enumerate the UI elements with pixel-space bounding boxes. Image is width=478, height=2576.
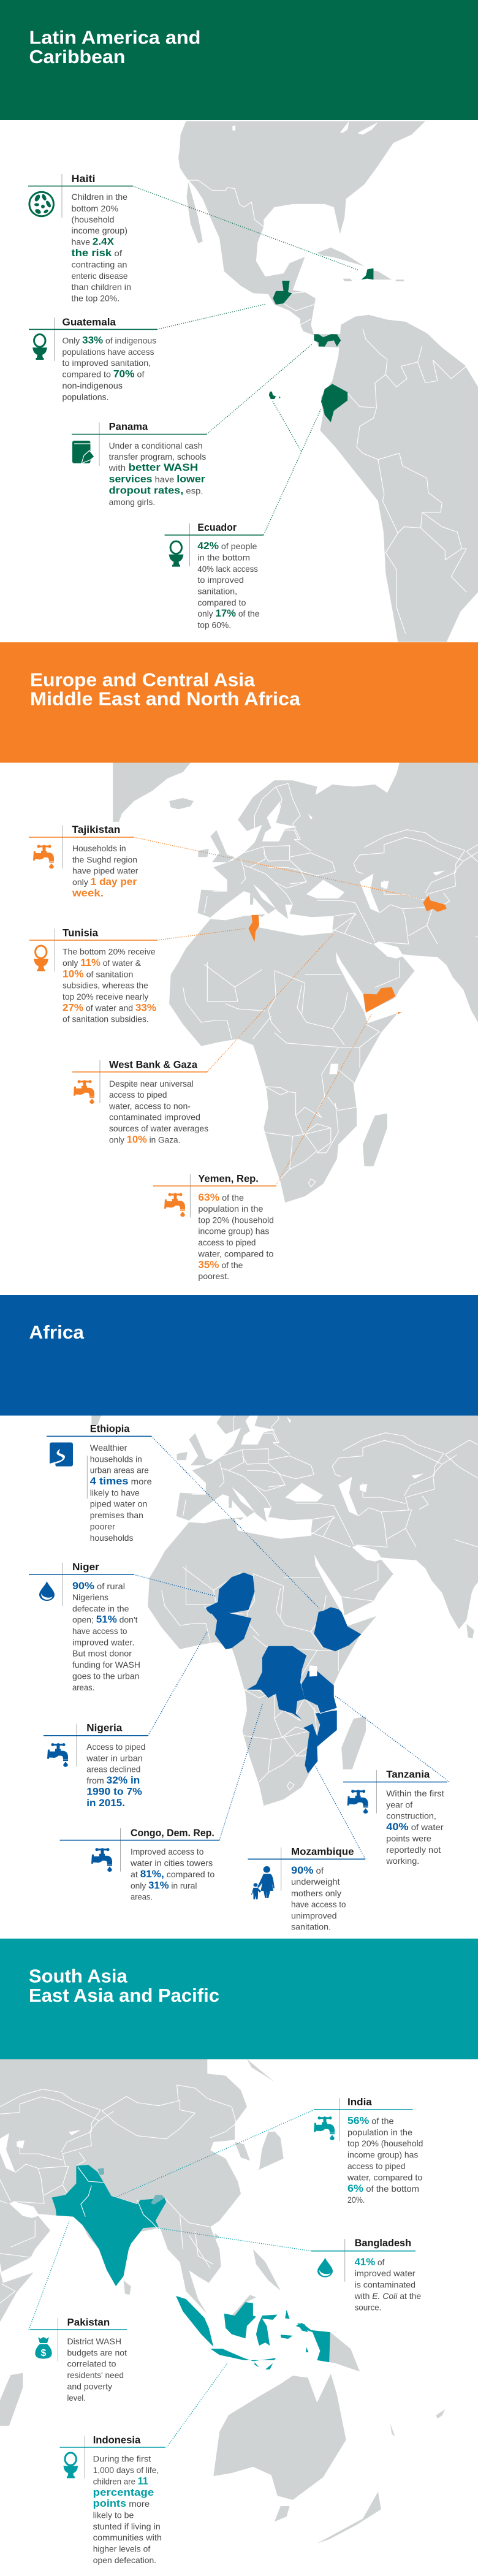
highlighted islands: Galapagos	[269, 392, 281, 399]
text: India statistic: 56% of the	[347, 2115, 394, 2127]
text: Indonesia statistic: stunted if living in	[93, 2521, 161, 2531]
text: Haiti statistic: have 2.4X	[71, 236, 115, 248]
text: Haiti statistic	[71, 192, 131, 303]
text: Ecuador statistic: 40% lack access	[197, 564, 258, 574]
highlighted country: Congo, Dem. Rep.	[247, 1646, 306, 1720]
text: Ecuador statistic: in the bottom	[197, 552, 250, 562]
text: Yemen statistic: 63% of the	[198, 1191, 244, 1203]
text: Congo statistic: at 81%, compared to	[131, 1868, 215, 1880]
callout: West Bank & Gaza	[72, 1058, 208, 1145]
icon: money bag: $	[41, 2348, 47, 2358]
text: West Bank & Gaza statistic: sources of water averages	[109, 1123, 208, 1133]
map: North and South America	[178, 121, 478, 642]
text: Ethiopia statistic: urban areas are	[90, 1465, 149, 1475]
callout: West Bank & Gaza: West Bank & Gaza	[109, 1058, 198, 1070]
icon: water tap	[91, 1848, 112, 1872]
text: West Bank & Gaza statistic: access to piped	[109, 1090, 167, 1100]
section header: Africa: Africa	[29, 1321, 85, 1343]
map: Asia and Oceania	[0, 2022, 445, 2544]
icon: water tap	[74, 1080, 94, 1104]
text: Yemen statistic: population in the	[198, 1204, 264, 1214]
leader lines: South and East Asia	[29, 2110, 314, 2447]
text: Congo statistic: only 31% in rural	[131, 1879, 197, 1891]
text: Indonesia statistic: higher levels of	[93, 2544, 150, 2553]
callout: Mozambique: Mozambique	[291, 1846, 354, 1858]
text: Tunisia statistic: subsidies, whereas the	[63, 981, 148, 990]
text: Guatemala statistic: to improved sanitation,	[63, 358, 151, 368]
callout: India: India	[347, 2096, 372, 2108]
text: Yemen statistic: access to piped	[198, 1237, 256, 1247]
callout: Ethiopia: Ethiopia	[90, 1423, 130, 1435]
icon: water tap	[33, 845, 54, 868]
text: Haiti statistic: the risk of	[71, 247, 122, 259]
leader lines: Europe and MENA	[134, 837, 422, 1186]
text: Tanzania statistic: working.	[385, 1856, 419, 1866]
text: Tajikistan statistic: the Sughd region	[72, 854, 137, 864]
text: Guatemala statistic: populations have access	[63, 347, 154, 357]
callout: Tunisia	[29, 927, 157, 1024]
text: Indonesia statistic: likely to be	[93, 2510, 134, 2520]
text: Guatemala statistic	[63, 334, 156, 401]
text: Ecuador statistic: to improved	[197, 575, 244, 585]
text: Yemen statistic: poorest.	[198, 1271, 229, 1281]
text: Mozambique statistic: sanitation.	[291, 1922, 331, 1932]
text: Ethiopia statistic: Wealthier	[90, 1443, 127, 1453]
panel: Europe, Central Asia, Middle East and North Africa section	[0, 642, 478, 1284]
callout: Yemen, Rep.: Yemen, Rep.	[198, 1172, 259, 1184]
text: Niger statistic	[72, 1580, 140, 1692]
text: India statistic	[347, 2115, 423, 2205]
text: Haiti statistic: Children in the	[71, 192, 127, 202]
text: Tunisia statistic: 10% of sanitation	[63, 968, 133, 979]
map: Africa and Eurasia	[91, 1366, 478, 1887]
icon: bacteria	[29, 192, 54, 216]
highlighted country: Yemen	[363, 987, 402, 1014]
text: Pakistan statistic: District WASH	[67, 2336, 121, 2346]
text: India statistic: population in the	[347, 2127, 412, 2137]
icon: water tap	[314, 2116, 335, 2140]
callout: Indonesia	[60, 2434, 165, 2565]
icon: toilet	[63, 2453, 78, 2478]
text: Pakistan statistic	[67, 2336, 127, 2403]
text: Nigeria statistic: Access to piped	[86, 1742, 145, 1752]
highlighted country: Niger	[206, 1573, 254, 1614]
leader lines: Latin America	[132, 186, 359, 535]
text: Congo statistic	[130, 1847, 215, 1902]
panel: South Asia, East Asia and Pacific section	[0, 1939, 478, 2565]
text: Niger statistic: Nigeriens	[72, 1592, 108, 1602]
callout: Panama	[72, 421, 207, 507]
text: Tanzania statistic: construction,	[386, 1811, 436, 1821]
icon: water drop	[317, 2258, 333, 2278]
text: Tanzania statistic: 40% of water	[386, 1821, 444, 1833]
text: Tajikistan statistic: only 1 day per	[72, 876, 137, 887]
callout: Tanzania	[343, 1768, 447, 1866]
text: Nigeria statistic: 1990 to 7%	[86, 1786, 142, 1797]
callout: Ecuador	[165, 522, 264, 630]
callout: Tajikistan	[29, 824, 138, 899]
section header: Latin America and Caribbean: Latin America and	[29, 27, 201, 48]
callout: Pakistan: Pakistan	[67, 2317, 110, 2328]
text: Panama statistic	[108, 441, 206, 507]
text: Yemen statistic: water, compared to	[197, 1248, 274, 1258]
text: India statistic: 6% of the bottom	[347, 2183, 419, 2194]
icon: toilet	[169, 541, 184, 567]
text: Ethiopia statistic: households in	[90, 1454, 142, 1464]
highlighted country: Tunisia	[248, 915, 259, 942]
text: Panama statistic: transfer program, schools	[109, 452, 206, 462]
text: Mozambique statistic: underweight	[291, 1877, 340, 1886]
callout: Tanzania: Tanzania	[386, 1768, 430, 1780]
text: Haiti statistic: the top 20%.	[71, 293, 120, 303]
text: Niger statistic: areas.	[72, 1682, 94, 1692]
text: Tunisia statistic: of sanitation subsidies.	[63, 1014, 149, 1024]
text: Nigeria statistic: in 2015.	[86, 1797, 125, 1809]
text: Ethiopia statistic: likely to have	[90, 1487, 140, 1497]
text: Bangladesh statistic: is contaminated	[355, 2280, 415, 2290]
text: Indonesia statistic: 1,000 days of life,	[93, 2465, 159, 2475]
text: India statistic: water, compared to	[347, 2172, 423, 2182]
text: Pakistan statistic: level.	[67, 2393, 86, 2403]
section header: Latin America and Caribbean: Caribbean	[29, 46, 125, 67]
highlighted country: Guatemala	[273, 281, 292, 305]
text: Tanzania statistic: Within the first	[386, 1788, 444, 1798]
callout: Yemen, Rep.	[153, 1172, 276, 1281]
text: Panama statistic: with better WASH	[108, 462, 198, 473]
text: West Bank & Gaza statistic: only 10% in Gaza.	[109, 1134, 180, 1145]
text: Bangladesh statistic: with E. Coli at the	[354, 2291, 421, 2301]
text: Pakistan statistic: and poverty	[67, 2381, 112, 2391]
text: India statistic: top 20% (household	[347, 2138, 423, 2148]
section header: Africa	[0, 1295, 478, 1416]
icon: water tap	[47, 1743, 68, 1767]
leader lines: Africa	[134, 1436, 449, 1859]
text: Ethiopia statistic: poorer	[90, 1521, 115, 1531]
icon: water drop	[39, 1581, 55, 1601]
text: Tajikistan statistic: have piped water	[72, 866, 138, 876]
text: Bangladesh statistic: improved water	[355, 2268, 415, 2278]
text: Guatemala statistic: Only 33% of indigenous	[63, 334, 156, 346]
highlighted country: Ecuador	[321, 384, 347, 422]
text: Tanzania statistic: year of	[386, 1799, 412, 1809]
text: Niger statistic: open; 51% don't	[72, 1614, 138, 1625]
text: Yemen statistic: top 20% (household	[198, 1215, 274, 1225]
callout: Pakistan	[30, 2317, 127, 2403]
text: Ecuador statistic: compared to	[197, 598, 246, 607]
section header: South Asia, East Asia and Pacific: South Asia	[29, 1965, 127, 1986]
text: Bangladesh statistic	[354, 2256, 421, 2312]
highlighted country: Tajikistan	[423, 895, 447, 912]
text: Pakistan statistic: residents' need	[67, 2370, 124, 2380]
panel: Latin America and Caribbean section	[0, 0, 478, 642]
text: West Bank & Gaza statistic: water, access to non-	[108, 1101, 191, 1111]
icon: water tap	[164, 1193, 185, 1217]
text: Congo statistic: areas.	[131, 1892, 153, 1902]
text: Tunisia statistic	[63, 947, 156, 1024]
text: West Bank & Gaza statistic	[108, 1079, 208, 1145]
text: Haiti statistic: enteric disease	[71, 271, 128, 281]
highlighted country: Tanzania	[302, 1671, 337, 1714]
callout: India	[314, 2096, 423, 2205]
callout: Guatemala: Guatemala	[63, 316, 116, 328]
text: Niger statistic: improved water.	[72, 1637, 135, 1647]
text: Guatemala statistic: non-indigenous	[63, 381, 123, 390]
text: Yemen statistic	[197, 1191, 274, 1281]
callout: Tunisia: Tunisia	[63, 927, 99, 939]
text: Nigeria statistic	[86, 1742, 145, 1809]
icon: toilet	[32, 335, 47, 360]
text: Ecuador statistic: 42% of people	[197, 540, 257, 552]
text: Pakistan statistic: correlated to	[67, 2359, 116, 2369]
section header: South Asia, East Asia and Pacific	[0, 1939, 478, 2059]
text: Tanzania statistic: reportedly not	[386, 1845, 441, 1855]
text: Indonesia statistic: open defecation.	[93, 2555, 156, 2565]
text: Mozambique statistic: 90% of	[291, 1864, 324, 1876]
icon: money bag	[35, 2337, 52, 2358]
text: Niger statistic: defecate in the	[72, 1603, 129, 1613]
text: Tunisia statistic: top 20% receive nearly	[63, 992, 148, 1001]
text: Panama statistic: dropout rates, esp.	[109, 484, 203, 496]
text: Mozambique statistic: mothers only	[291, 1888, 341, 1898]
panel: Africa section	[0, 1295, 478, 1932]
highlighted country: Ethiopia	[314, 1607, 362, 1651]
text: Nigeria statistic: water in urban	[86, 1753, 143, 1763]
callout: Nigeria: Nigeria	[86, 1722, 123, 1734]
text: Indonesia statistic: During the first	[93, 2454, 151, 2464]
text: Ecuador statistic: sanitation,	[197, 586, 237, 596]
callout: Congo, Dem. Rep.: Congo, Dem. Rep.	[131, 1827, 214, 1839]
text: Mozambique statistic: unimproved	[291, 1910, 337, 1920]
text: Ethiopia statistic: households	[90, 1533, 133, 1543]
text: Tajikistan statistic: week.	[72, 887, 104, 899]
callout: Niger	[29, 1561, 140, 1692]
text: Haiti statistic: income group)	[71, 226, 127, 235]
callout: Mozambique	[248, 1846, 365, 1932]
text: India statistic: 20%.	[347, 2195, 365, 2205]
text: Yemen statistic: 35% of the	[198, 1259, 243, 1271]
text: Indonesia statistic: points more	[93, 2498, 150, 2509]
text: Panama statistic: among girls.	[109, 497, 155, 507]
highlighted country: Mozambique	[303, 1711, 337, 1774]
section header: South Asia, East Asia and Pacific: East Asia and Pacific	[29, 1985, 219, 2006]
text: Congo statistic: water in cities towers	[130, 1858, 213, 1868]
text: Haiti statistic: bottom 20%	[71, 203, 118, 213]
callout: Haiti: Haiti	[71, 173, 96, 184]
text: Haiti statistic: contracting an	[71, 260, 127, 270]
callout: Indonesia: Indonesia	[93, 2434, 141, 2445]
callout: Niger: Niger	[72, 1561, 99, 1573]
callout: Guatemala	[29, 316, 157, 401]
callout: Bangladesh: Bangladesh	[355, 2237, 411, 2249]
callout: Bangladesh	[311, 2237, 421, 2312]
text: Pakistan statistic: budgets are not	[67, 2347, 127, 2357]
text: Guatemala statistic: populations.	[63, 392, 109, 401]
callout: Nigeria	[44, 1722, 148, 1809]
text: Ethiopia statistic	[90, 1443, 152, 1543]
text: Bangladesh statistic: source.	[355, 2302, 381, 2312]
map: Europe, Middle East and Africa	[113, 762, 478, 1284]
highlighted country: Panama	[314, 334, 341, 346]
text: Panama statistic: Under a conditional cash	[109, 441, 203, 450]
text: Indonesia statistic: percentage	[93, 2487, 154, 2498]
highlighted country: Indonesia	[176, 2296, 330, 2369]
text: Niger statistic: But most donor	[72, 1649, 132, 1658]
text: Ethiopia statistic: piped water on	[90, 1499, 147, 1509]
highlighted country: Haiti	[362, 268, 373, 279]
text: West Bank & Gaza statistic: contaminated improved	[109, 1112, 200, 1122]
text: Bangladesh statistic: 41% of	[355, 2256, 384, 2268]
callout: Haiti	[28, 173, 132, 303]
callout: Congo, Dem. Rep.	[60, 1827, 219, 1902]
text: Indonesia statistic: children are 11	[93, 2475, 148, 2487]
text: Tanzania statistic: points were	[386, 1834, 431, 1844]
text: Ethiopia statistic: 4 times more	[90, 1475, 152, 1487]
highlighted countries: South Asia	[52, 2165, 166, 2286]
text: Indonesia statistic: communities with	[93, 2532, 162, 2542]
icon: water tap	[347, 1790, 368, 1814]
text: Ecuador statistic: only 17% of the	[197, 607, 260, 619]
text: West Bank & Gaza statistic: Despite near universal	[109, 1079, 194, 1089]
text: Yemen statistic: income group) has	[198, 1226, 269, 1236]
callout: Tajikistan: Tajikistan	[72, 824, 120, 835]
text: Mozambique statistic: have access to	[291, 1899, 346, 1909]
text: Tajikistan statistic: Households in	[72, 843, 126, 853]
text: Niger statistic: funding for WASH	[72, 1660, 140, 1670]
text: Ethiopia statistic: premises than	[90, 1510, 143, 1520]
text: Guatemala statistic: compared to 70% of	[63, 368, 145, 380]
text: Ecuador statistic: top 60%.	[197, 620, 231, 630]
section header: Latin America and Caribbean	[0, 0, 478, 120]
text: Tunisia statistic: The bottom 20% receive	[63, 947, 156, 957]
text: Tajikistan statistic	[72, 843, 138, 899]
text: India statistic: access to piped	[347, 2161, 406, 2171]
text: Niger statistic: have access to	[72, 1626, 127, 1636]
icon: mother and child	[251, 1866, 275, 1899]
text: Indonesia statistic	[93, 2454, 162, 2565]
callout: Panama: Panama	[109, 421, 148, 433]
text: Ecuador statistic	[197, 540, 260, 630]
icon: toilet	[34, 946, 48, 971]
text: Tunisia statistic: 27% of water and 33%	[63, 1001, 156, 1013]
section header: Europe and Central Asia, Middle East and North Africa	[0, 642, 478, 762]
text: Mozambique statistic	[291, 1864, 346, 1932]
icon: river	[50, 1443, 73, 1466]
icon: book and pen	[72, 441, 94, 463]
text: Niger statistic: goes to the urban	[72, 1671, 140, 1681]
text: Tanzania statistic	[385, 1788, 444, 1866]
highlighted country: Nigeria	[210, 1611, 251, 1649]
text: Haiti statistic: than children in	[71, 282, 131, 292]
section header: Europe and Central Asia, Middle East and North Africa: Middle East and North Africa	[30, 688, 301, 710]
text: Congo statistic: Improved access to	[131, 1847, 204, 1856]
text: Haiti statistic: (household	[71, 215, 114, 224]
text: Nigeria statistic: from 32% in	[86, 1774, 140, 1786]
callout: Ecuador: Ecuador	[197, 522, 237, 533]
text: Niger statistic: 90% of rural	[72, 1580, 125, 1592]
text: Tunisia statistic: only 11% of water &	[63, 957, 142, 968]
text: India statistic: income group) has	[347, 2150, 418, 2160]
text: Panama statistic: services have lower	[109, 473, 205, 485]
section header: Europe and Central Asia, Middle East and North Africa: Europe and Central Asia	[30, 669, 255, 690]
callout: Ethiopia	[47, 1423, 152, 1543]
text: Nigeria statistic: areas declined	[86, 1765, 140, 1774]
